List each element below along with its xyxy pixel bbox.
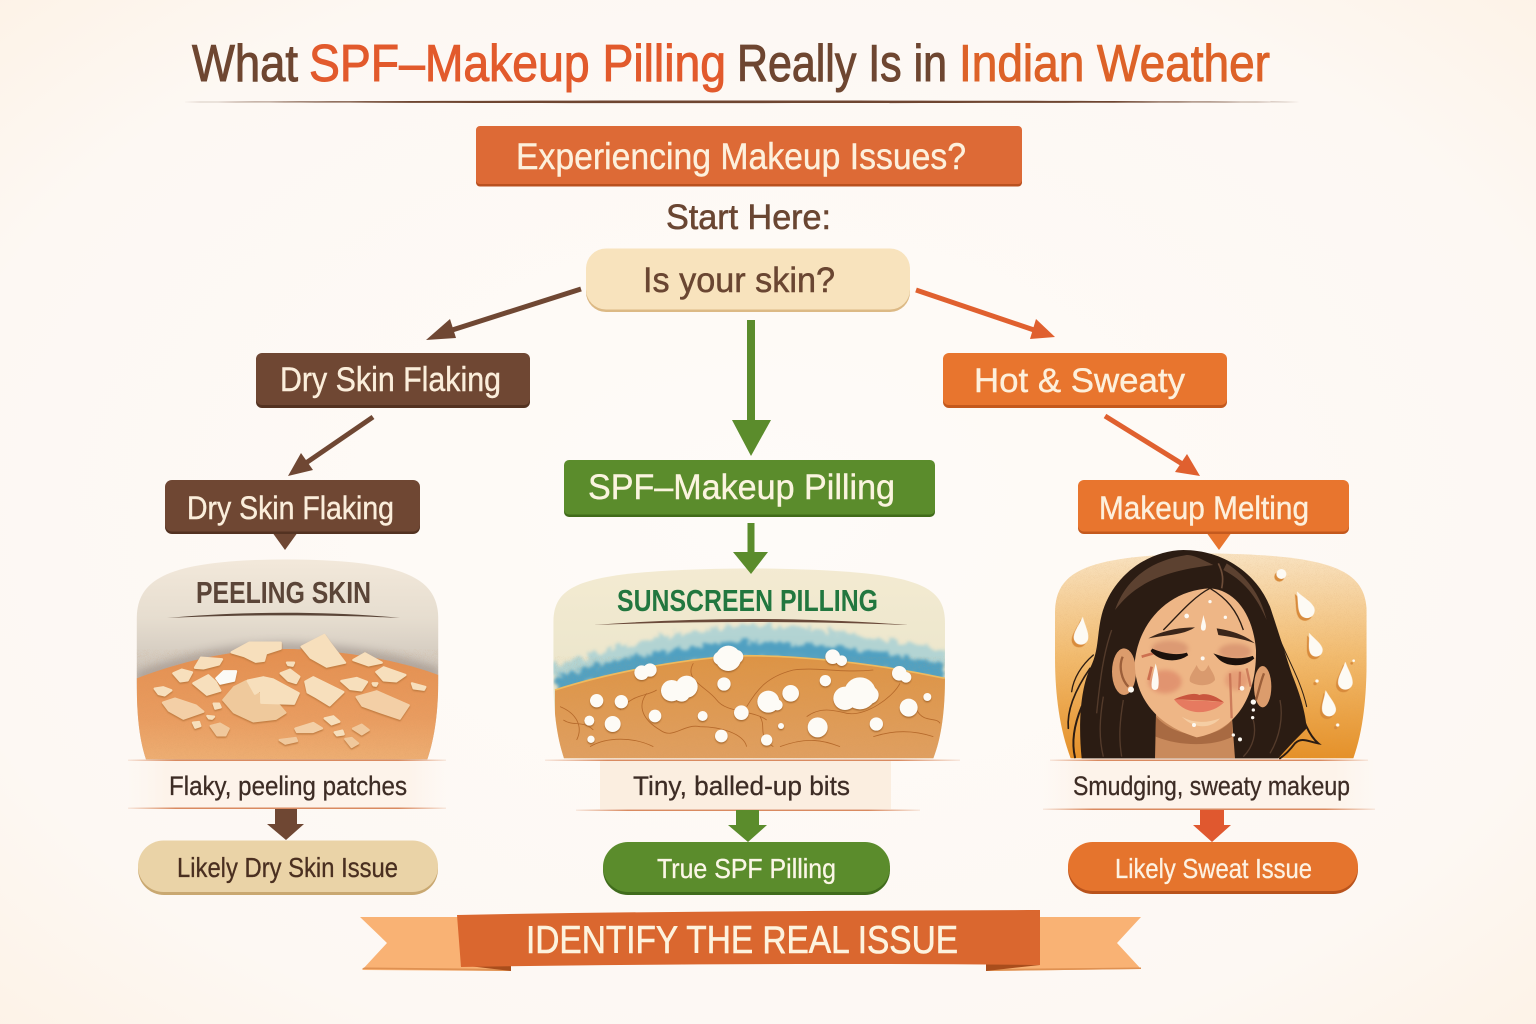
icon: hair back [1080, 550, 1307, 758]
icon: neck [1155, 713, 1235, 758]
result pill: Likely Dry Skin Issue: Likely Dry Skin Issue [177, 852, 398, 883]
icon: blush and smudges [1148, 670, 1182, 693]
arrow: green to sunscreen panel [733, 523, 768, 574]
result pill: True SPF Pilling: True SPF Pilling [657, 853, 836, 884]
result pill: Likely Dry Skin Issue [138, 840, 438, 895]
label: Hot and Sweaty: Hot & Sweaty [974, 362, 1185, 400]
label: Dry Skin Flaking lower [165, 480, 420, 550]
icon: nose [1190, 665, 1215, 685]
caption: flaky, peeling patches: Flaky, peeling patches [169, 771, 407, 801]
panel heading: SUNSCREEN PILLING: SUNSCREEN PILLING [617, 583, 878, 618]
icon: ears [1112, 648, 1136, 695]
label: SPF-Makeup Pilling: SPF–Makeup Pilling [588, 468, 895, 507]
caption: tiny balled-up bits [545, 760, 960, 811]
header banner: Experiencing Makeup Issues? [476, 126, 1022, 186]
header banner: Experiencing Makeup Issues?: Experiencing Makeup Issues? [516, 136, 966, 177]
result pill: True SPF Pilling [603, 842, 890, 895]
result pill: Likely Sweat Issue: Likely Sweat Issue [1115, 853, 1312, 884]
icon: forehead sweat [1128, 600, 1256, 741]
arrow: orange to sweat result [1193, 810, 1231, 842]
icon: face [1135, 588, 1256, 737]
label: Dry Skin Flaking top [256, 353, 530, 408]
icon: eyelids and lashes [1152, 640, 1188, 656]
arrow: to SPF pilling [732, 320, 771, 456]
label: Dry Skin Flaking top: Dry Skin Flaking [280, 361, 501, 399]
icon: eyebrows [1148, 627, 1195, 638]
icon: lips [1174, 694, 1224, 702]
caption: smudging, sweaty makeup: Smudging, sweaty makeup [1073, 771, 1350, 801]
arrow: to hot and sweaty [916, 290, 1055, 339]
title: Indian Weather [959, 35, 1270, 93]
caption: tiny balled-up bits: Tiny, balled-up bits [633, 771, 850, 801]
question box: Is your skin? [586, 248, 910, 312]
result pill: Likely Sweat Issue [1068, 842, 1358, 894]
label: SPF-Makeup Pilling [564, 460, 935, 517]
arrow: dry skin step down [288, 417, 373, 476]
panel: peeling skin illustration [133, 557, 443, 763]
title: SPF–Makeup Pilling [309, 35, 726, 93]
label: Dry Skin Flaking lower: Dry Skin Flaking [187, 490, 394, 526]
caption: flaky, peeling patches [128, 760, 446, 809]
icon: falling sweat drops [1073, 569, 1355, 727]
ribbon banner: IDENTIFY THE REAL ISSUE: IDENTIFY THE REAL ISSUE [526, 919, 958, 962]
arrow: brown to dry skin result [267, 809, 304, 840]
panel: sweaty woman illustration [1050, 550, 1373, 763]
panel: sunscreen pilling illustration [550, 563, 950, 763]
text: Start Here: Start Here: [666, 198, 831, 237]
panel heading: PEELING SKIN: PEELING SKIN [196, 575, 371, 610]
caption: smudging, sweaty makeup [1043, 760, 1375, 810]
label: Makeup Melting [1078, 480, 1349, 550]
icon: fringe strands [1163, 588, 1243, 630]
arrow: green to SPF result [728, 810, 767, 842]
question box: Is your skin?: Is your skin? [643, 261, 835, 300]
arrow: to dry skin [426, 289, 581, 340]
label: Hot and Sweaty [943, 353, 1227, 408]
label: Makeup Melting: Makeup Melting [1099, 490, 1309, 526]
title: What [192, 35, 298, 93]
arrow: hot step down [1105, 416, 1200, 476]
ribbon banner: IDENTIFY THE REAL ISSUE [360, 910, 1141, 971]
title: Really Is in [737, 35, 947, 93]
title [192, 35, 1270, 93]
